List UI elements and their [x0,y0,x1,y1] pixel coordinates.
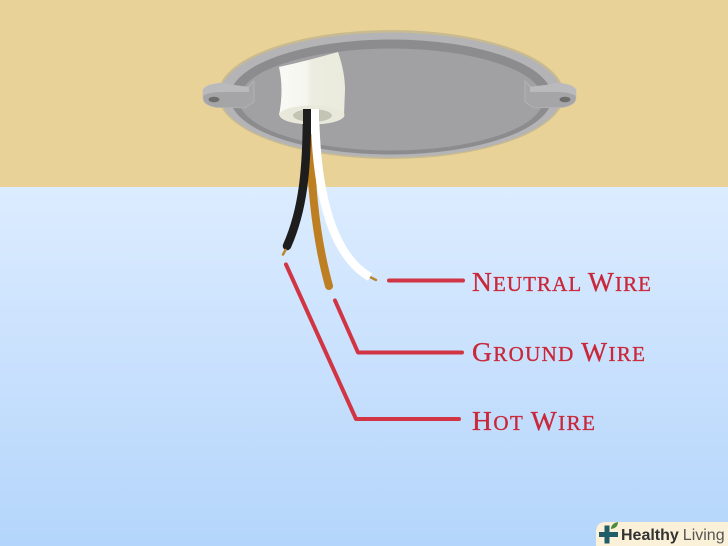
brown ground wire [310,125,329,286]
right mounting ear [525,81,576,108]
lamp socket [279,52,345,124]
leader line: hot [286,264,459,419]
hot wire copper tip [283,250,286,254]
room wall background [0,187,728,546]
leader line: neutral [389,278,463,282]
label: neutral wire: NEUTRAL WIRE [472,266,651,297]
icon: plus with leaf [599,522,618,544]
wires emerging from socket [303,109,319,134]
left mounting ear [203,81,254,108]
black hot wire [287,112,307,246]
leader line: ground [335,300,462,352]
ceiling fixture plate [203,30,576,159]
label: hot wire: HOT WIRE [472,405,595,436]
ceiling background [0,0,728,187]
label: ground wire: GROUND WIRE [472,336,645,367]
neutral wire copper tip [371,278,376,280]
logo: Healthy Living [596,522,728,546]
white neutral wire [315,115,370,277]
logo wordmark: HealthyLiving [621,527,725,544]
